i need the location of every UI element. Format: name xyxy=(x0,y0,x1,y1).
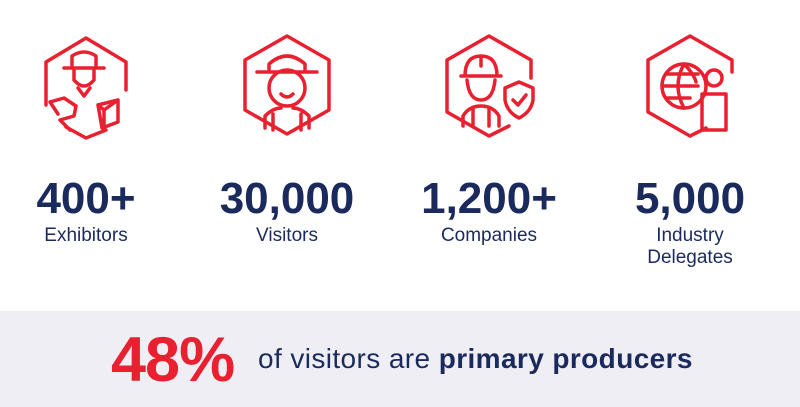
stat: visitors: Visitors xyxy=(256,225,318,246)
icon: globe and person xyxy=(646,34,734,138)
stat: companies xyxy=(421,34,557,246)
stat: visitors: 30,000 xyxy=(220,174,354,223)
stat: delegates: Industry xyxy=(656,225,724,246)
stat: companies: Companies xyxy=(441,225,537,246)
icon: worker with hard hat and shield xyxy=(445,34,535,138)
stat: exhibitors: Exhibitors xyxy=(44,225,128,246)
stat: visitors xyxy=(220,34,354,246)
stat: delegates: 5,000 xyxy=(635,174,745,223)
stat: delegates xyxy=(635,34,745,268)
big percentage: 48% xyxy=(111,325,234,395)
band text: of visitors are primary producers xyxy=(258,343,693,374)
stat: exhibitors: 400+ xyxy=(36,174,136,223)
stat: delegates: Delegates xyxy=(647,247,733,268)
bottom band: primary producers xyxy=(0,311,800,407)
stat: exhibitors xyxy=(36,36,136,246)
icon: exhibitor farmer with cow and box xyxy=(44,36,128,140)
icon: visitor woman with hat xyxy=(243,34,331,136)
stat: companies: 1,200+ xyxy=(421,174,557,223)
